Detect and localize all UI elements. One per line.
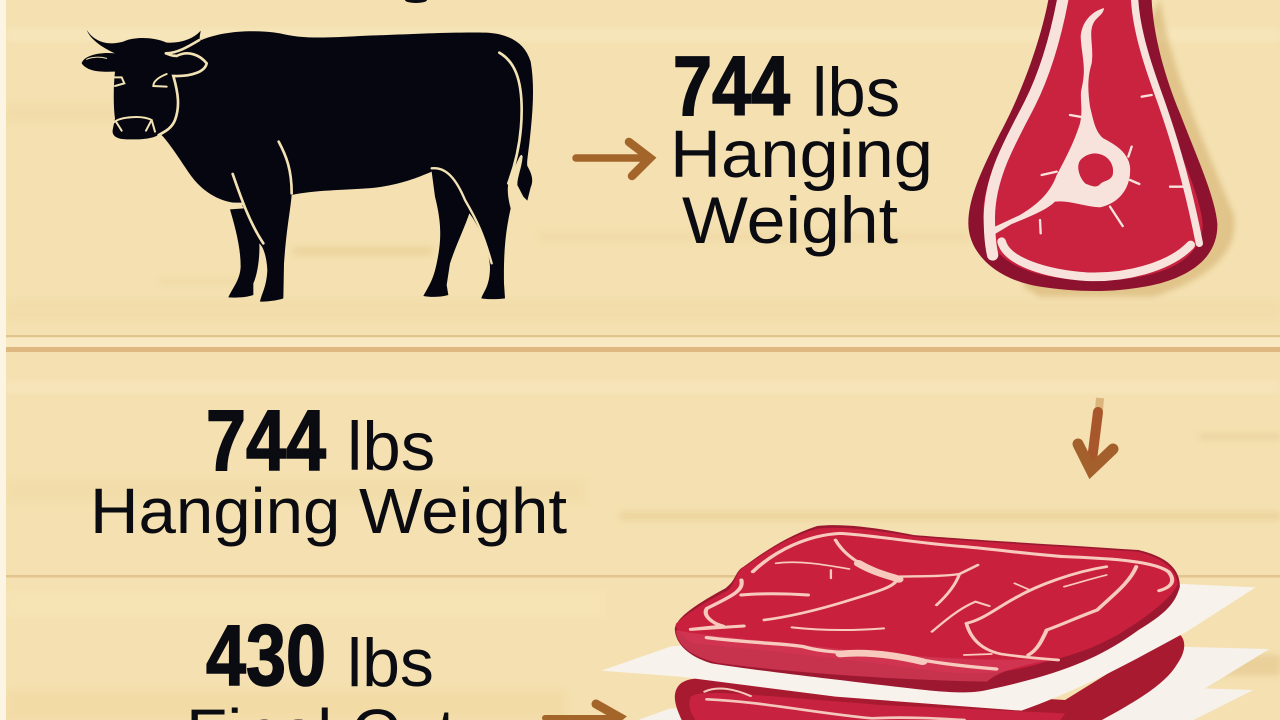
text block: 744 lbs hanging weight: 744 — [673, 39, 790, 133]
text block: 744 lbs: 744 — [206, 393, 326, 489]
paper sheet upper — [601, 583, 1256, 711]
text block: 744 lbs hanging weight: Weight — [682, 183, 898, 257]
icon: stacked steaks with paper — [601, 525, 1269, 720]
arrow: down to final cut — [1078, 398, 1113, 470]
text block: 744 lbs: lbs — [347, 408, 435, 485]
paper sheets lower — [638, 647, 1269, 720]
icon: hanging side of beef — [968, 0, 1234, 297]
text block: 744 lbs hanging weight: lbs — [812, 54, 900, 131]
text block: 744 lbs — [90, 393, 567, 547]
icon: cow silhouette — [82, 30, 533, 302]
arrow: cow to hanging weight — [576, 142, 650, 176]
text block: 430 lbs final cut: 430 — [206, 608, 326, 704]
clipped heading descender — [405, 0, 427, 3]
text block: 744 lbs hanging weight — [670, 39, 933, 257]
steak lower — [675, 632, 1184, 720]
marbling — [691, 533, 1172, 669]
arrow: to final cut — [545, 704, 619, 720]
text block: 430 lbs final cut: lbs — [347, 625, 434, 701]
text block: 744 lbs: Hanging Weight — [90, 475, 567, 547]
text block: 744 lbs hanging weight: Hanging — [670, 117, 933, 192]
text block: 430 lbs final cut — [186, 608, 456, 720]
steak upper — [675, 525, 1180, 692]
